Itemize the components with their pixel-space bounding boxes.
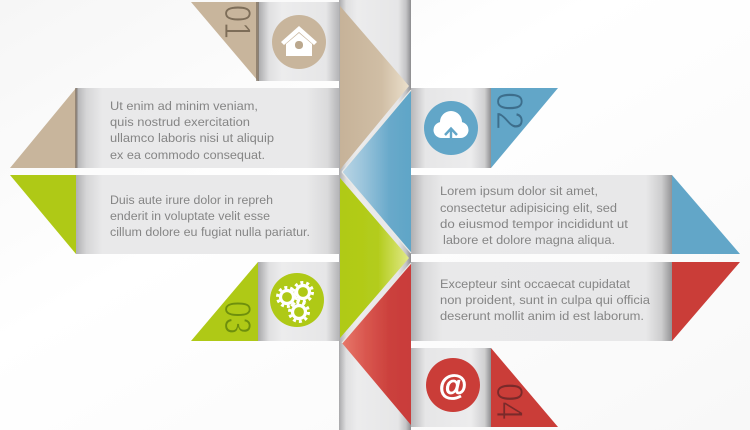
fold: red [342, 263, 411, 425]
fold: green [340, 178, 409, 338]
text block: Duis aute irure dolor in repreh [110, 193, 273, 207]
text block: labore et dolore magna aliqua. [443, 233, 615, 247]
number 02: 02 [489, 92, 530, 130]
number 01: 01 [217, 5, 258, 39]
panel: text band upper right [411, 175, 740, 254]
text block: quis nostrud exercitation [110, 115, 250, 129]
text block [110, 99, 274, 162]
text block: Lorem ipsum dolor sit amet, [440, 184, 598, 198]
panel: step 02 tab [411, 88, 558, 168]
text block: enderit in voluptate velit esse [110, 209, 270, 223]
icon: gears [270, 273, 324, 327]
text block: ullamco laboris nisi ut aliquip [110, 131, 274, 145]
panel: text band middle left [10, 175, 339, 254]
icon: at sign: @ [439, 370, 467, 402]
text block: consectetur adipisicing elit, sed [440, 201, 617, 215]
text block: cillum dolore eu fugiat nulla pariatur. [110, 225, 310, 239]
text block [110, 193, 310, 239]
icon: at sign [426, 358, 480, 412]
icon: cloud upload [424, 101, 478, 155]
panel: text band lower right [411, 262, 740, 341]
fold: blue [342, 90, 411, 253]
text block [440, 184, 629, 247]
panel: step 04 tab [411, 348, 558, 427]
fold: tan [340, 6, 409, 170]
panel: central folded column [339, 0, 411, 430]
number 03: 03 [217, 301, 258, 334]
text block: ex ea commodo consequat. [110, 148, 265, 162]
number 04: 04 [489, 383, 530, 420]
text block [440, 277, 650, 323]
panel: step 01 tab [191, 2, 339, 81]
text block: do eiusmod tempor incididunt ut [440, 217, 629, 231]
text block: non proident, sunt in culpa qui officia [440, 293, 650, 307]
icon: home [272, 15, 326, 69]
text block: Excepteur sint occaecat cupidatat [440, 277, 631, 291]
panel: text band upper left [10, 88, 339, 168]
panel: step 03 tab [191, 262, 339, 341]
text block: Ut enim ad minim veniam, [110, 99, 258, 113]
text block: deserunt mollit anim id est laborum. [440, 309, 644, 323]
